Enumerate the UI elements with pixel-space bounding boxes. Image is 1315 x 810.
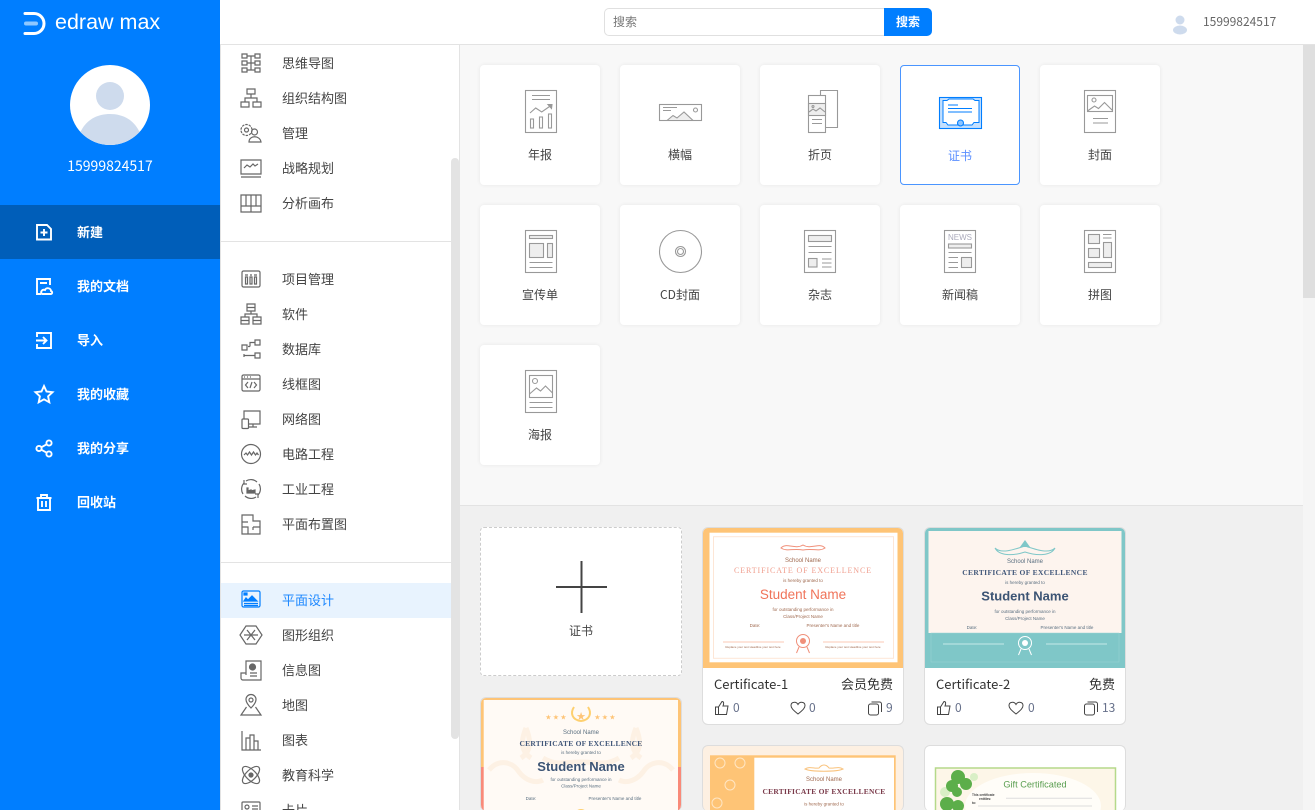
new blank template card (480, 527, 682, 676)
thumbnail: is hereby granted to (804, 802, 844, 806)
template: gift certificate (924, 745, 1126, 810)
row: project management: 项目管理 (282, 269, 334, 288)
list scrollbar (451, 158, 459, 739)
thumbnail: CERTIFICATE OF EXCELLENCE (734, 566, 872, 575)
price tag: 免费 (1089, 674, 1115, 693)
row: industrial: 工业工程 (282, 479, 334, 498)
thumbnail: is hereby granted to (783, 578, 823, 583)
thumbnail (925, 746, 1125, 810)
thumbnail: CERTIFICATE OF EXCELLENCE (762, 787, 886, 796)
icon: like (715, 701, 729, 715)
thumbnail: Class/Project Name (783, 614, 823, 619)
icon: favorites (33, 384, 55, 404)
thumbnail: Student Name (760, 587, 846, 602)
thumbnail (703, 528, 903, 668)
logo mark (24, 12, 46, 35)
row: software (240, 303, 308, 325)
row: education: 教育科学 (282, 765, 334, 784)
thumbnail: CERTIFICATE OF EXCELLENCE (519, 739, 643, 748)
thumbnail (481, 698, 681, 810)
row: database (241, 339, 321, 359)
row: chart: 图表 (282, 730, 308, 749)
top bar (220, 0, 1315, 45)
card: certificate (selected) (900, 65, 1020, 185)
thumbnail: CERTIFICATE OF EXCELLENCE (962, 568, 1088, 577)
card: cover (1040, 65, 1160, 185)
thumbnail: School Name (806, 777, 843, 783)
title: Certificate-2 (936, 674, 1010, 693)
row: mind map (241, 53, 334, 73)
thumbnail: Date: (526, 796, 536, 801)
thumbnail: School Name (1007, 559, 1044, 565)
icon: copy (1084, 702, 1098, 716)
thumbnail: ★★★ (545, 714, 568, 722)
icon: copy (868, 702, 882, 716)
template: certificate with crest (480, 697, 682, 810)
row: education (242, 765, 334, 784)
icon: heart (790, 702, 806, 714)
row: chart (241, 730, 308, 751)
card: press release (900, 205, 1020, 325)
thumbnail: for outstanding performance in (550, 777, 612, 782)
thumbnail: ★★★ (594, 714, 617, 722)
row: analysis canvas (240, 193, 334, 213)
card: CD cover: CD封面 (660, 286, 700, 303)
card: banner (620, 65, 740, 185)
search button: 搜索 (896, 13, 920, 30)
card: press release: 新闻稿 (942, 286, 978, 303)
card: flyer (480, 205, 600, 325)
thumbnail: ★ (576, 710, 586, 723)
card: magazine: 杂志 (808, 286, 832, 303)
thumbnail: to: (972, 801, 976, 805)
row: management (240, 123, 308, 143)
card: cover: 封面 (1088, 146, 1112, 163)
row: graphic design (active) (221, 583, 451, 618)
icon: share (36, 440, 52, 458)
card: collage: 拼图 (1088, 286, 1112, 303)
user id: 15999824517 (67, 156, 153, 176)
left sidebar (0, 0, 220, 810)
row: graphic organizer: 图形组织 (282, 625, 334, 644)
thumbnail: is hereby granted to (1005, 580, 1045, 585)
thumbnail: Class/Project Name (561, 784, 601, 788)
row: graphic organizer (239, 625, 334, 645)
card: banner: 横幅 (668, 146, 692, 163)
nav: my documents: 我的文档 (77, 276, 129, 295)
row: floor plan: 平面布置图 (282, 514, 347, 533)
panel: category list (220, 45, 460, 810)
likes count: 0 (955, 699, 962, 716)
thumbnail: Replace your text Headline your text here (825, 645, 881, 649)
row: project management (241, 269, 334, 288)
row: map: 地图 (282, 695, 308, 714)
thumbnail: School Name (563, 730, 600, 736)
scrollbar thumb (1303, 45, 1315, 298)
thumbnail: Class/Project Name (1005, 616, 1045, 621)
thumbnail: Presenter's Name and title (807, 623, 860, 628)
row: circuit (240, 444, 334, 464)
title: Certificate-1 (714, 674, 788, 693)
thumbnail: for outstanding performance in (994, 609, 1056, 614)
search input: 搜索 (613, 13, 637, 30)
icon: my documents (36, 278, 54, 295)
price tag: 会员免费 (841, 674, 893, 693)
row: graphic design (active): 平面设计 (282, 590, 334, 609)
nav: recycle bin: 回收站 (77, 492, 116, 511)
logo (24, 10, 160, 35)
row: network: 网络图 (282, 409, 321, 428)
row: circuit: 电路工程 (282, 444, 334, 463)
active nav highlight (0, 205, 220, 259)
icon: import (36, 332, 52, 349)
search button (884, 8, 932, 36)
card: certificate (selected): 证书 (948, 147, 972, 164)
row: network (241, 409, 321, 430)
icon: like (937, 701, 951, 715)
thumbnail: Student Name (981, 588, 1069, 604)
thumbnail: Gift Certificated (1003, 780, 1067, 790)
thumbnail: This certificate (972, 793, 995, 797)
row: cards (241, 800, 308, 810)
thumbnail (710, 755, 896, 810)
thumbnail: Replace your text Headline your text here (725, 645, 781, 649)
row: org chart (240, 88, 347, 108)
nav: share: 我的分享 (77, 438, 129, 457)
icon: heart (1008, 702, 1024, 714)
row: software: 软件 (282, 304, 308, 323)
panel: template types (460, 45, 1303, 506)
card: poster (480, 345, 600, 465)
icon: user (1173, 16, 1187, 34)
row: mind map: 思维导图 (282, 53, 334, 72)
card: folded page (760, 65, 880, 185)
thumbnail: is hereby granted to (561, 750, 601, 755)
panel: template gallery (460, 506, 1303, 810)
card: folded page: 折页 (808, 146, 832, 163)
favorites count: 0 (1028, 699, 1035, 716)
row: map (240, 694, 308, 716)
favorites count: 0 (809, 699, 816, 716)
row: wireframe: 线框图 (282, 374, 321, 393)
row: org chart: 组织结构图 (282, 88, 347, 107)
logo text: edraw max (55, 10, 160, 34)
row: analysis canvas: 分析画布 (282, 193, 334, 212)
card: flyer: 宣传单 (522, 286, 558, 303)
row: infographic (240, 660, 321, 681)
row: database: 数据库 (282, 339, 321, 358)
avatar (70, 65, 150, 145)
nav: new: 新建 (77, 222, 103, 241)
thumbnail: Presenter's Name and title (589, 796, 642, 801)
card: press release: NEWS (948, 233, 972, 242)
copies count: 9 (886, 699, 893, 716)
thumbnail: Student Name (537, 759, 625, 774)
thumbnail: for outstanding performance in (772, 607, 834, 612)
nav: favorites: 我的收藏 (77, 384, 129, 403)
nav: import: 导入 (77, 330, 103, 349)
icon: plus (556, 561, 607, 613)
card: annual report (480, 65, 600, 185)
thumbnail: Presenter's Name and title (1041, 625, 1094, 630)
template: Certificate-2 (924, 527, 1126, 725)
thumbnail (925, 528, 1125, 668)
row: infographic: 信息图 (282, 660, 321, 679)
copies count: 13 (1102, 699, 1115, 716)
label: 证书 (569, 622, 593, 639)
template: Certificate-1 (702, 527, 904, 725)
thumbnail: Date: (750, 623, 760, 628)
thumbnail: entitles: (979, 797, 991, 801)
card: CD cover (620, 205, 740, 325)
thumbnail: School Name (785, 558, 822, 564)
row: industrial (241, 479, 334, 499)
likes count: 0 (733, 699, 740, 716)
card: poster: 海报 (528, 426, 552, 443)
thumbnail: Date: (967, 625, 977, 630)
row: management: 管理 (282, 123, 308, 142)
icon: new (36, 224, 52, 240)
user id: 15999824517 (1203, 13, 1276, 30)
right scrollbar (1303, 45, 1315, 810)
row: strategy: 战略规划 (282, 158, 334, 177)
card: annual report: 年报 (528, 146, 552, 163)
row: strategy (240, 158, 334, 178)
row: wireframe (241, 374, 321, 393)
card: collage (1040, 205, 1160, 325)
search input (604, 8, 884, 36)
template: orange side certificate (702, 745, 904, 810)
row: floor plan (241, 514, 347, 535)
card: magazine (760, 205, 880, 325)
icon: recycle bin (36, 494, 52, 511)
